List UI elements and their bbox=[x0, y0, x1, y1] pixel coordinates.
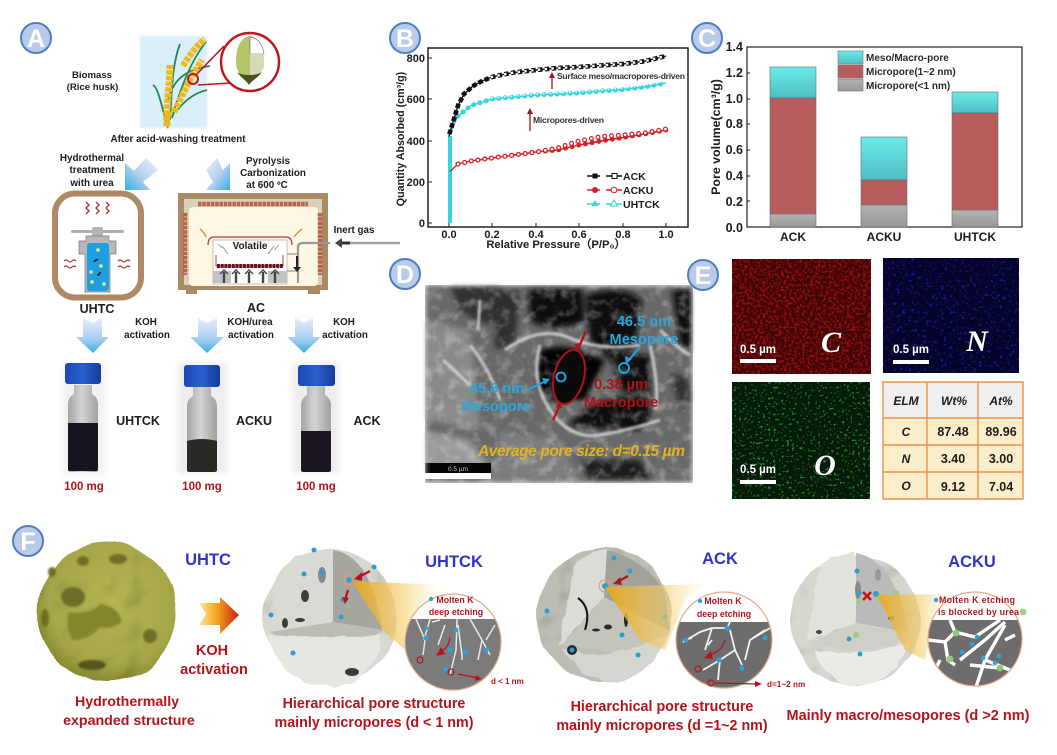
table: elemental composition: 9.12 bbox=[941, 480, 965, 494]
series: ACKU bbox=[450, 129, 666, 172]
table: elemental composition: 3.40 bbox=[941, 452, 965, 466]
table: elemental composition: 3.00 bbox=[989, 452, 1013, 466]
table: elemental composition: O bbox=[901, 479, 911, 493]
text: UHTCK caption: mainly micropores (d < 1 nm) bbox=[274, 715, 474, 731]
inset: UHTCK deep etching: deep etching bbox=[429, 607, 483, 617]
chart frame and axes: 1.2 bbox=[726, 66, 743, 80]
badge C bbox=[692, 23, 722, 53]
y axis title: Quantity Absorbed (cm³/g) bbox=[395, 71, 407, 206]
badge A: A bbox=[27, 25, 45, 53]
legend: UHTCK bbox=[623, 199, 660, 211]
text: inert gas: Inert gas bbox=[334, 225, 375, 236]
chart frame and axes: 0.4 bbox=[528, 229, 545, 241]
annotation: macropore ellipse bbox=[548, 331, 590, 420]
photo: SEM image: 0.5 µm bbox=[448, 466, 468, 473]
label: 100 mg: 100 mg bbox=[64, 481, 104, 493]
text: pyrolysis carbonization bbox=[240, 156, 306, 191]
text: 0.38 um macropore: Macropore bbox=[584, 395, 658, 411]
text: biomass bbox=[67, 70, 118, 93]
text: UHTCK caption: Hierarchical pore structure bbox=[283, 696, 465, 712]
chart frame and axes: 0.8 bbox=[726, 117, 743, 131]
arrow: to pyrolysis bbox=[206, 158, 230, 190]
text: pyrolysis carbonization: Carbonization bbox=[240, 168, 306, 179]
badge F bbox=[13, 526, 43, 556]
chart frame and axes bbox=[726, 40, 1022, 244]
arrow: AC to ACK bbox=[287, 318, 321, 353]
label: ACKU: ACKU bbox=[236, 414, 272, 428]
table: elemental composition: ELM bbox=[893, 394, 920, 408]
inset: UHTCK deep etching: Molten K bbox=[436, 595, 474, 605]
icon: hydrothermal autoclave bbox=[54, 193, 142, 298]
label: UHTC: UHTC bbox=[185, 551, 231, 569]
chart frame and axes: 0.6 bbox=[571, 229, 587, 241]
badge C: C bbox=[698, 25, 716, 53]
text: KOH activation 2 bbox=[322, 317, 368, 341]
highlight beam: ACK bbox=[605, 584, 705, 650]
text: pyrolysis carbonization: Pyrolysis bbox=[246, 156, 290, 167]
y axis title: Pore volume(cm³/g) bbox=[709, 79, 723, 195]
panel B: adsorption isotherm chart bbox=[390, 23, 688, 251]
chart frame and axes: UHTCK bbox=[954, 230, 996, 244]
text: 45.8 nm mesopore: 45.8 nm bbox=[470, 381, 524, 397]
text: hydrothermal treatment bbox=[60, 153, 124, 189]
text: UHTCK caption bbox=[274, 696, 474, 731]
table: elemental composition: Wt% bbox=[941, 394, 967, 408]
badge F: F bbox=[20, 528, 36, 556]
chart frame and axes: 600 bbox=[407, 94, 425, 106]
text: KOH activation 2: KOH bbox=[333, 317, 355, 328]
map: nitrogen: 0.5 µm bbox=[893, 344, 929, 356]
chart frame and axes: 0.4 bbox=[726, 169, 743, 183]
text: 46.5 nm mesopore bbox=[610, 314, 678, 348]
photo: SEM image bbox=[425, 285, 693, 483]
annotation: surface meso/macropores-driven: Surface meso/macropores-driven bbox=[557, 71, 685, 81]
chart frame and axes bbox=[407, 48, 688, 241]
photo: UHTCK vial bbox=[63, 363, 105, 475]
inset: ACKU etching blocked: Molten K etching bbox=[939, 595, 1015, 605]
text: KOH activation 2: activation bbox=[322, 330, 368, 341]
text: KOH/urea activation bbox=[227, 317, 274, 341]
map: nitrogen: N bbox=[965, 325, 989, 358]
highlight beam: UHTCK bbox=[352, 581, 440, 650]
inset: UHTCK deep etching bbox=[404, 593, 502, 691]
table: elemental composition: C bbox=[902, 425, 911, 439]
map: oxygen bbox=[732, 382, 870, 499]
map: carbon: C bbox=[821, 326, 842, 359]
table: elemental composition: 89.96 bbox=[985, 425, 1017, 439]
chart frame and axes: 400 bbox=[407, 136, 425, 148]
text: KOH/urea activation: KOH/urea bbox=[227, 317, 273, 328]
chart frame and axes: 0.0 bbox=[726, 221, 743, 235]
map: carbon bbox=[732, 259, 871, 374]
inset: ACKU etching blocked: is blocked by urea bbox=[938, 607, 1019, 617]
chart frame and axes: 0.8 bbox=[615, 229, 631, 241]
annotation: micropores-driven bbox=[527, 108, 604, 131]
text: hydrothermally expanded structure: expanded structure bbox=[63, 713, 195, 729]
chart frame and axes: 1.4 bbox=[726, 40, 743, 54]
text: ACK caption: Hierarchical pore structure bbox=[571, 699, 753, 715]
label: UHTCK: UHTCK bbox=[116, 414, 160, 428]
chart frame and axes: 1.0 bbox=[658, 229, 674, 241]
table: elemental composition: N bbox=[902, 452, 911, 466]
table: elemental composition: 87.48 bbox=[937, 425, 969, 439]
text: KOH/urea activation: activation bbox=[228, 330, 274, 341]
badge E bbox=[688, 260, 718, 290]
inset: ACKU etching blocked bbox=[927, 591, 1026, 687]
illustration: UHTC sphere bbox=[37, 542, 177, 682]
text: 0.38 um macropore bbox=[584, 377, 658, 411]
text: KOH activation bbox=[180, 643, 248, 678]
badge D bbox=[390, 259, 420, 289]
text: hydrothermal treatment: with urea bbox=[69, 178, 114, 189]
text: KOH activation: KOH bbox=[196, 643, 228, 659]
label: ACK: ACK bbox=[702, 550, 738, 568]
chart frame and axes: 0.6 bbox=[726, 143, 743, 157]
map: oxygen: O bbox=[814, 449, 836, 482]
chart frame and axes: 0.2 bbox=[726, 195, 743, 209]
series: ACK bbox=[449, 56, 666, 136]
icon: pyrolysis furnace: Volatile bbox=[233, 241, 268, 252]
chart frame and axes: 0.0 bbox=[441, 229, 457, 241]
text: hydrothermal treatment: Hydrothermal bbox=[60, 153, 124, 164]
badge E: E bbox=[695, 262, 711, 290]
annotation: surface meso/macropores-driven bbox=[549, 71, 685, 89]
text: KOH activation bbox=[124, 317, 170, 341]
arrow: AC to ACKU bbox=[190, 318, 224, 353]
badge D: D bbox=[396, 261, 414, 289]
text: KOH activation: KOH bbox=[135, 317, 157, 328]
label: ACK: ACK bbox=[353, 414, 381, 428]
text: KOH activation: activation bbox=[124, 330, 170, 341]
text: pyrolysis carbonization: at 600 ºC bbox=[246, 180, 288, 191]
chart frame and axes: 1.0 bbox=[726, 92, 743, 106]
badge B: B bbox=[396, 25, 414, 53]
photo: ACK vial bbox=[292, 362, 340, 474]
illustration: UHTCK sphere bbox=[263, 548, 397, 686]
inset: ACK deep etching bbox=[675, 591, 773, 689]
legend: Micropore(<1 nm) bbox=[866, 81, 950, 92]
map: carbon: 0.5 µm bbox=[740, 344, 776, 356]
annotation: mesopore markers bbox=[527, 347, 640, 390]
badge B bbox=[390, 23, 420, 53]
arrow: to hydrothermal bbox=[125, 158, 158, 190]
panel A: synthesis workflow bbox=[21, 23, 400, 493]
text: KOH activation: activation bbox=[180, 662, 248, 678]
legend: ACK bbox=[623, 171, 646, 183]
chart frame and axes: 0 bbox=[419, 218, 425, 230]
map: oxygen: 0.5 µm bbox=[740, 464, 776, 476]
label: ACKU: ACKU bbox=[948, 553, 996, 571]
annotation: micropores-driven: Micropores-driven bbox=[533, 115, 604, 125]
icon: rice plant with husk magnifier bbox=[140, 33, 279, 130]
inset: ACK deep etching: Molten K bbox=[704, 596, 742, 606]
series: UHTCK bbox=[449, 81, 666, 223]
text: d=1~2 nm: d=1~2 nm bbox=[767, 680, 805, 689]
panel F: pore formation mechanism bbox=[13, 526, 1030, 734]
chart frame and axes: 0.2 bbox=[484, 229, 500, 241]
label: UHTCK: UHTCK bbox=[425, 553, 483, 571]
highlight beam: ACKU bbox=[877, 594, 950, 660]
text: 0.38 um macropore: 0.38 µm bbox=[594, 377, 648, 393]
chart frame and axes: ACKU bbox=[867, 230, 901, 244]
text: average pore size: Average pore size: d=0.15 µm bbox=[477, 443, 685, 460]
chart frame and axes: 200 bbox=[407, 177, 425, 189]
text: 45.8 nm mesopore bbox=[462, 381, 530, 415]
text: 45.8 nm mesopore: Mesopore bbox=[462, 399, 530, 415]
badge A bbox=[21, 23, 51, 53]
illustration: ACKU sphere bbox=[790, 553, 920, 687]
chart frame and axes: 800 bbox=[407, 53, 425, 65]
text: 46.5 nm mesopore: Mesopore bbox=[610, 332, 678, 348]
legend bbox=[587, 171, 660, 211]
text: hydrothermally expanded structure bbox=[63, 694, 195, 729]
panel E: elemental maps and table bbox=[688, 258, 1023, 499]
panel D: SEM micrograph bbox=[390, 259, 693, 483]
legend: ACKU bbox=[623, 185, 653, 197]
text: ACKU caption: Mainly macro/mesopores (d >2 nm) bbox=[787, 708, 1030, 724]
text: hydrothermal treatment: treatment bbox=[70, 165, 115, 176]
bar: ACK bbox=[770, 67, 816, 227]
inset: ACK deep etching: deep etching bbox=[697, 609, 751, 619]
label: AC: AC bbox=[247, 301, 265, 315]
bar: UHTCK bbox=[952, 92, 998, 227]
bar: ACKU bbox=[861, 137, 907, 227]
photo: ACKU vial bbox=[178, 362, 228, 474]
illustration: ACK sphere bbox=[537, 548, 671, 683]
text: after acid-washing treatment: After acid-washing treatment bbox=[110, 134, 246, 145]
chart frame and axes: ACK bbox=[780, 230, 806, 244]
text: ACK caption bbox=[556, 699, 768, 734]
arrow: inert gas inlet bbox=[335, 238, 400, 248]
arrow: KOH activation bbox=[199, 597, 239, 634]
text: ACK caption: mainly micropores (d =1~2 nm) bbox=[556, 718, 768, 734]
table: elemental composition: 7.04 bbox=[989, 480, 1013, 494]
label: 100 mg: 100 mg bbox=[296, 481, 336, 493]
icon: pyrolysis furnace bbox=[178, 193, 330, 294]
label: UHTC: UHTC bbox=[80, 302, 114, 316]
map: nitrogen bbox=[883, 258, 1019, 373]
text: hydrothermally expanded structure: Hydrothermally bbox=[75, 694, 179, 710]
text: biomass: (Rice husk) bbox=[67, 82, 118, 93]
text: biomass: Biomass bbox=[72, 70, 112, 81]
label: 100 mg: 100 mg bbox=[182, 481, 222, 493]
table: elemental composition bbox=[883, 382, 1023, 499]
x axis title: Relative Pressure（P/P₀） bbox=[486, 238, 626, 251]
text: d<1 nm: d < 1 nm bbox=[491, 677, 524, 686]
legend: Meso/Macro-pore bbox=[866, 53, 949, 64]
legend: Micropore(1~2 nm) bbox=[866, 67, 956, 78]
text: 46.5 nm mesopore: 46.5 nm bbox=[617, 314, 671, 330]
legend bbox=[838, 51, 956, 92]
panel C: pore volume stacked bars bbox=[692, 23, 1022, 244]
arrow: UHTC to UHTCK bbox=[76, 318, 109, 353]
table: elemental composition: At% bbox=[988, 394, 1013, 408]
